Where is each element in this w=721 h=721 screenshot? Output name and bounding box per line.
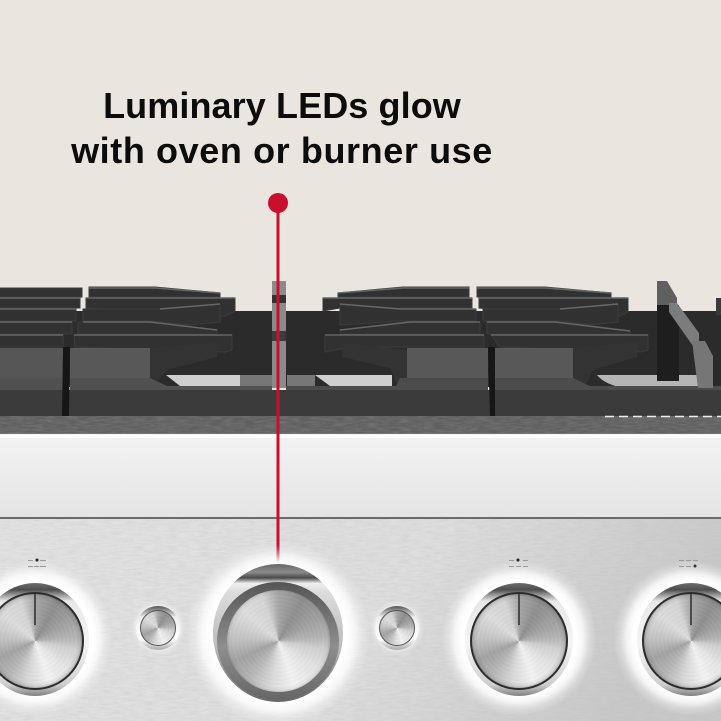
knob 1 [0,566,107,710]
right grate post [657,281,721,388]
small button right [372,604,422,652]
small button left [134,604,182,652]
heading: Luminary LEDs glow [103,85,461,126]
stainless fascia [0,434,721,519]
burner right [597,375,700,388]
grate fingers middle [323,287,484,352]
heading: with oven or burner use [71,130,493,171]
stainless control panel [0,519,721,721]
knob 3 [446,565,593,712]
grate front bars [0,347,721,416]
grate finger highlights [0,288,648,335]
burner left [166,375,272,387]
cooktop front strip [0,416,721,434]
heading [71,85,493,171]
grate back shadow [0,311,721,387]
centre grate post [272,281,286,388]
grate fingers right [477,287,648,352]
grate fingers left [0,287,235,352]
knob 2 centre [192,548,364,720]
burner middle [287,375,392,387]
knob 4 [617,564,721,712]
grate blocks [0,342,637,383]
